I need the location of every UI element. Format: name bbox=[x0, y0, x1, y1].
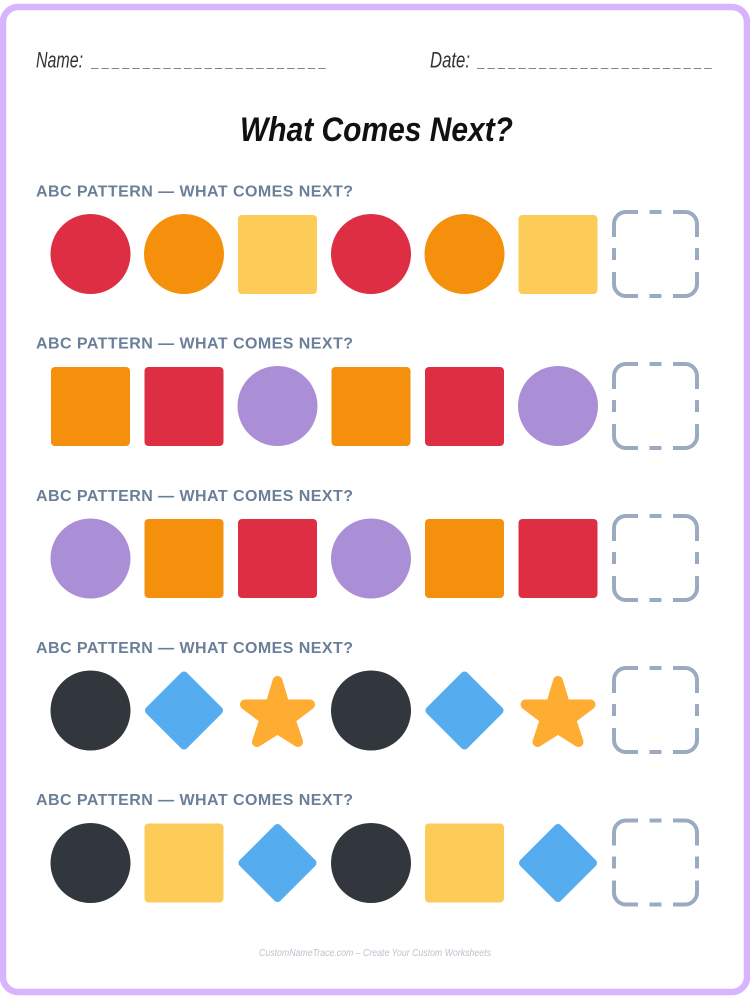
red square bbox=[144, 367, 224, 446]
empty answer box bbox=[614, 668, 697, 752]
date field: Date: bbox=[430, 48, 470, 72]
footer: CustomNameTrace.com – Create Your Custom Worksheets bbox=[259, 947, 492, 959]
red square bbox=[238, 519, 317, 598]
blue diamond bbox=[149, 676, 219, 746]
row 5 label: ABC PATTERN — WHAT COMES NEXT? bbox=[36, 792, 353, 809]
empty answer box bbox=[614, 820, 697, 904]
name field: _______________________ bbox=[90, 57, 328, 71]
date field bbox=[430, 48, 714, 72]
blue diamond bbox=[523, 828, 593, 898]
orange square bbox=[51, 367, 130, 446]
red circle bbox=[331, 214, 411, 294]
orange circle bbox=[144, 214, 224, 294]
orange star bbox=[245, 681, 310, 742]
orange star bbox=[526, 681, 590, 742]
purple circle bbox=[518, 366, 598, 446]
blue diamond bbox=[430, 676, 500, 746]
purple circle bbox=[50, 518, 130, 598]
red square bbox=[425, 367, 504, 446]
orange square bbox=[144, 519, 224, 598]
blue diamond bbox=[242, 828, 312, 898]
row 3: purple, orange, red pattern bbox=[36, 488, 697, 600]
red circle bbox=[50, 214, 130, 294]
empty answer box bbox=[614, 364, 697, 448]
row 2: orange, red, purple pattern bbox=[36, 336, 697, 448]
orange circle bbox=[424, 214, 504, 294]
yellow square bbox=[238, 215, 317, 294]
orange square bbox=[425, 519, 504, 598]
row 1 label: ABC PATTERN — WHAT COMES NEXT? bbox=[36, 184, 353, 200]
row 5: black, yellow, blue diamond pattern bbox=[36, 792, 697, 904]
dark circle bbox=[50, 823, 130, 903]
yellow square bbox=[144, 824, 224, 902]
row 1: red, orange, yellow pattern bbox=[36, 184, 697, 296]
dark circle bbox=[331, 670, 411, 750]
yellow square bbox=[518, 215, 598, 294]
row 2 label: ABC PATTERN — WHAT COMES NEXT? bbox=[36, 336, 353, 353]
name field: Name: bbox=[36, 48, 83, 72]
purple circle bbox=[238, 366, 318, 446]
empty answer box bbox=[614, 212, 697, 296]
dark circle bbox=[50, 670, 130, 750]
orange square bbox=[332, 367, 410, 446]
row 4: black, blue diamond, star pattern bbox=[36, 640, 697, 752]
name field bbox=[36, 48, 328, 72]
empty answer box bbox=[614, 516, 697, 600]
row 3 label: ABC PATTERN — WHAT COMES NEXT? bbox=[36, 488, 353, 505]
row 4 label: ABC PATTERN — WHAT COMES NEXT? bbox=[36, 640, 353, 657]
title: What Comes Next? bbox=[240, 110, 513, 148]
red square bbox=[518, 519, 598, 598]
yellow square bbox=[425, 824, 504, 902]
purple circle bbox=[331, 518, 411, 598]
date field: _______________________ bbox=[476, 57, 714, 71]
dark circle bbox=[331, 823, 411, 903]
